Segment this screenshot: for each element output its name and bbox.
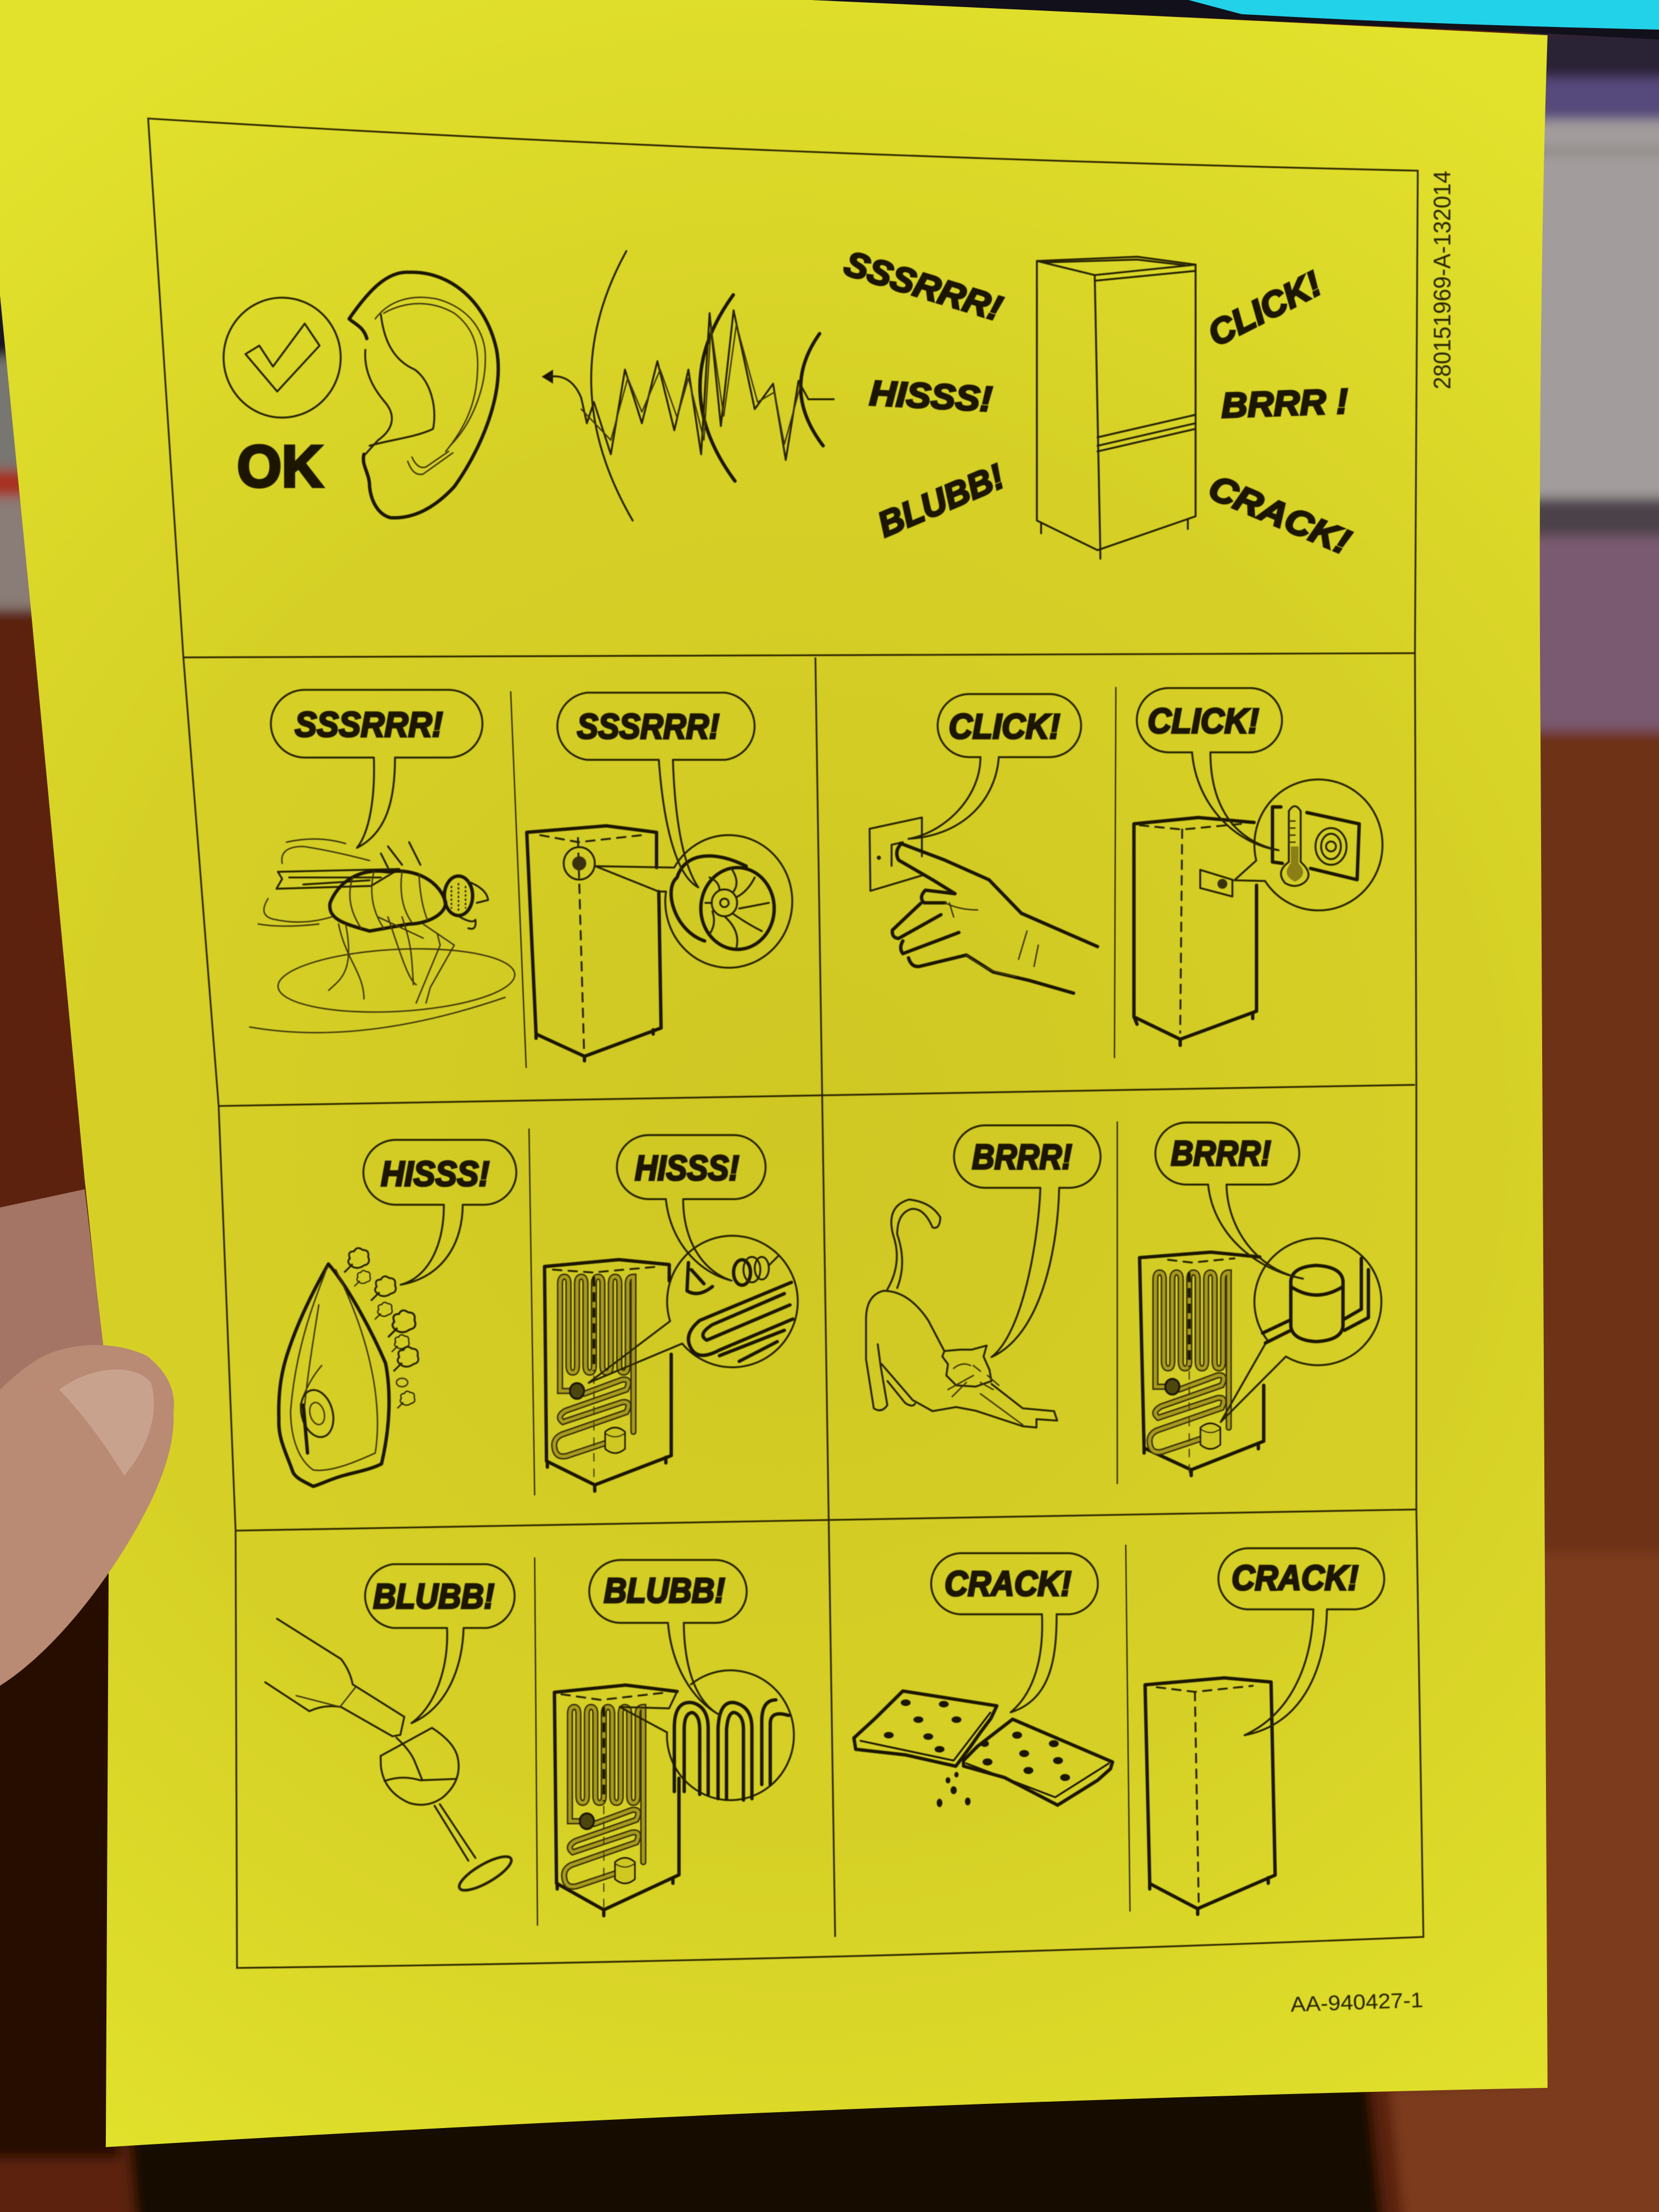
thumb <box>0 1345 174 1690</box>
icon: fridge side <box>1145 1548 1384 1914</box>
speech bubble: SSSRRR fan <box>557 693 754 887</box>
icon: stretching cat <box>866 1199 1057 1427</box>
sound labels <box>840 243 1356 562</box>
sound labels: BLUBB! <box>872 456 1009 545</box>
thumb nail highlight <box>59 1369 154 1476</box>
panel: CRACK <box>854 1548 1384 1914</box>
panel: CLICK <box>870 688 1383 1045</box>
speech bubble: CLICK thermostat <box>1137 688 1282 850</box>
sound labels: SSSRRR! <box>840 243 1007 329</box>
icon: check mark in circle <box>224 298 341 417</box>
panel: BRRR <box>866 1122 1381 1476</box>
speech bubble: SSSRRR fly: SSSRRR! <box>295 704 443 744</box>
speech bubble: SSSRRR fly <box>271 690 482 848</box>
speech bubble: CLICK switch: CLICK! <box>949 707 1060 746</box>
speech bubble: BRRR compressor <box>1155 1122 1303 1279</box>
speech bubble: HISSS condenser: HISSS! <box>635 1148 739 1188</box>
icon: steam puffs <box>344 1248 419 1408</box>
speech bubble: BRRR compressor: BRRR! <box>1171 1133 1271 1173</box>
part number vertical: 280151969-A-132014 <box>1429 171 1455 390</box>
icon: wine bottle and glass <box>265 1619 516 1896</box>
icon: fridge back with coils <box>545 1135 798 1491</box>
icon: broken cracker <box>854 1691 1113 1807</box>
panel: HISSS <box>279 1135 798 1491</box>
sound labels: CLICK! <box>1201 263 1328 354</box>
speech bubble: BLUBB wine: BLUBB! <box>373 1576 494 1616</box>
part number bottom: AA-940427-1 <box>1290 1988 1424 2017</box>
finger <box>0 1189 104 1410</box>
speech bubble: HISSS iron: HISSS! <box>381 1154 489 1193</box>
icon: fridge back with evaporator <box>555 1560 794 1916</box>
hand holding the sheet <box>0 1189 174 1690</box>
speech bubble: BLUBB evaporator: BLUBB! <box>604 1571 725 1610</box>
speech bubble: HISSS iron <box>363 1140 516 1285</box>
sound labels: HISSS! <box>868 373 993 419</box>
speech bubble: CLICK switch <box>909 694 1081 839</box>
speech bubble: BLUBB evaporator <box>589 1560 747 1716</box>
panel: BLUBB <box>265 1560 794 1916</box>
frame grid <box>148 119 1424 1968</box>
icon: fridge-freezer <box>1037 257 1195 558</box>
background: bright screen at top right <box>748 0 1659 40</box>
speech bubble: BRRR cat <box>954 1125 1101 1357</box>
icon: light switch <box>870 817 922 891</box>
sound labels: CRACK! <box>1203 467 1356 562</box>
speech bubble: BRRR cat: BRRR! <box>972 1137 1072 1176</box>
icon: ear <box>349 272 498 518</box>
speech bubble: CLICK thermostat: CLICK! <box>1148 701 1259 741</box>
icon: hand pressing switch <box>893 843 1098 993</box>
speech bubble: CRACK fridge <box>1218 1548 1384 1735</box>
icon: sound wave and arrow <box>541 251 834 521</box>
speech bubble: CRACK cracker: CRACK! <box>945 1564 1071 1603</box>
icon: fridge with fan <box>527 693 792 1061</box>
icon: fly <box>250 839 516 1032</box>
speech bubble: CRACK cracker <box>931 1553 1098 1712</box>
sound labels: BRRR ! <box>1221 381 1349 425</box>
label: OK: OK <box>237 433 323 499</box>
speech bubble: BLUBB wine <box>365 1564 515 1723</box>
icon: fridge back with compressor <box>1139 1122 1381 1476</box>
speech bubble: CRACK fridge: CRACK! <box>1232 1558 1358 1598</box>
icon: steam iron <box>279 1248 419 1486</box>
speech bubble: HISSS condenser <box>617 1135 766 1280</box>
speech bubble: SSSRRR fan: SSSRRR! <box>577 707 719 746</box>
panel: SSSRRR <box>250 690 792 1061</box>
panel: OK intro <box>224 243 1356 562</box>
icon: fridge with thermostat <box>1134 688 1383 1045</box>
